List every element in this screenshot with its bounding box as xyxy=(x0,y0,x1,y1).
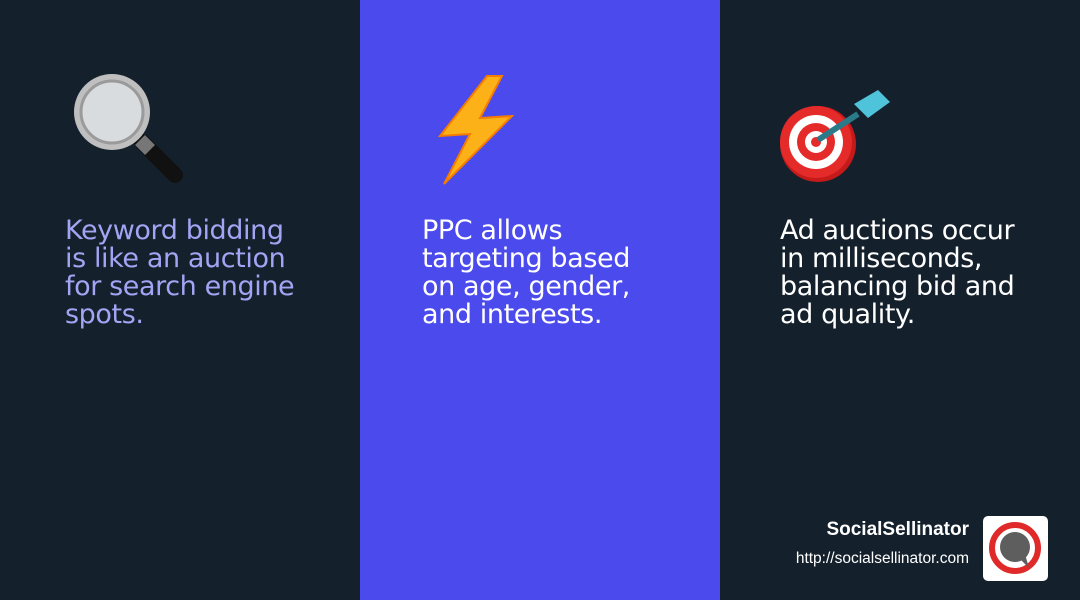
icon: magnifying glass xyxy=(74,74,183,183)
text: keyword bidding: Keyword bidding is like an auction for search engine spots. xyxy=(65,215,294,330)
icon: target with dart xyxy=(780,90,890,182)
logo xyxy=(983,516,1048,581)
brand url: http://socialsellinator.com xyxy=(796,550,969,567)
icon: lightning bolt xyxy=(438,75,514,185)
panel: middle column background xyxy=(360,0,720,600)
brand block xyxy=(796,516,1048,581)
brand name: SocialSellinator xyxy=(826,519,969,540)
text: ad auctions: Ad auctions occur in milliseconds, balancing bid and ad quality. xyxy=(780,215,1014,330)
text: PPC targeting: PPC allows targeting based on age, gender, and interests. xyxy=(422,215,630,330)
